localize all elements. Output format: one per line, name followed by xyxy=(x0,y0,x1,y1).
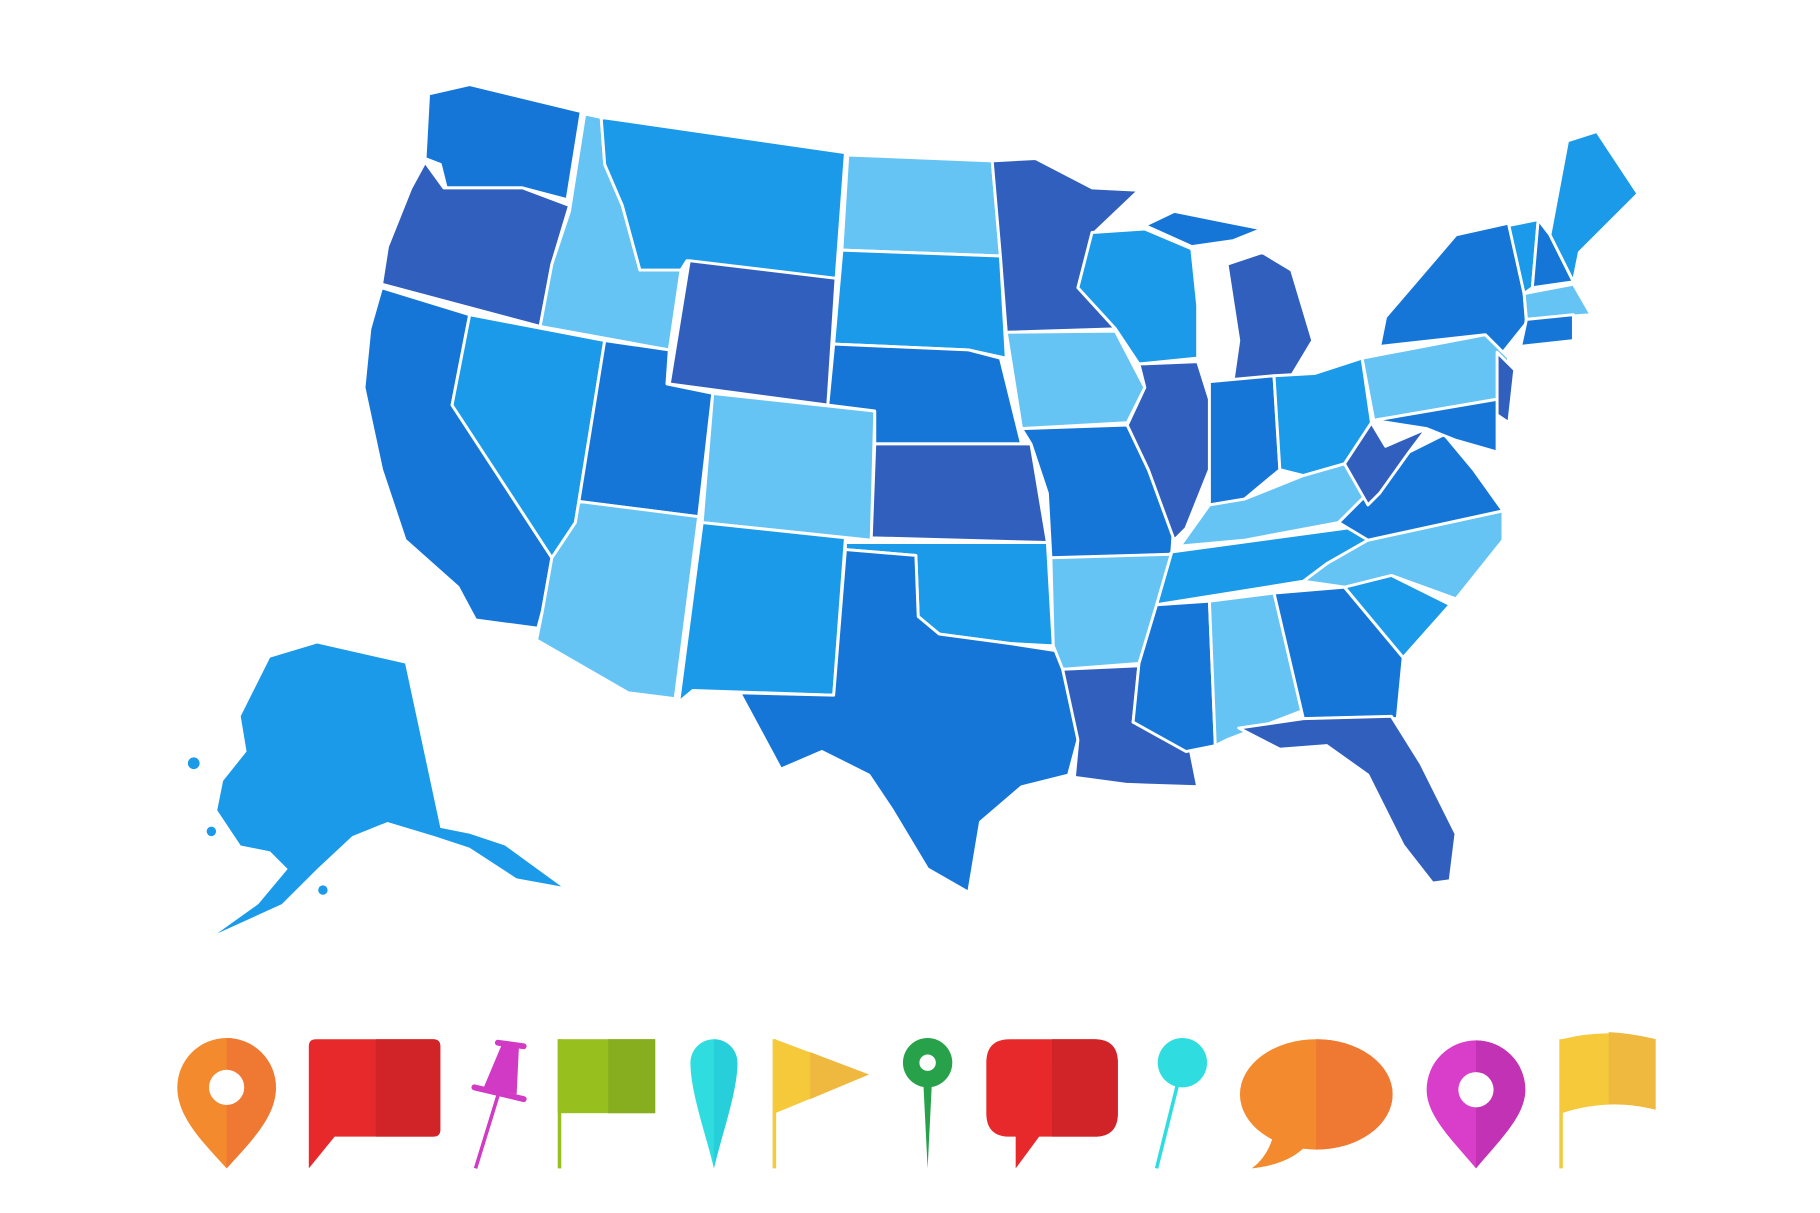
icon: red speech bubble xyxy=(309,1039,440,1168)
icon: magenta push pin xyxy=(474,1043,524,1168)
icon: magenta location pin xyxy=(1427,1040,1525,1168)
map: Alaska xyxy=(188,643,561,934)
icon: green needle pin xyxy=(903,1038,952,1168)
icon: orange oval speech bubble xyxy=(1240,1039,1393,1168)
icon: cyan drop pin xyxy=(690,1039,737,1168)
icon: cyan round pin xyxy=(1157,1038,1207,1168)
map: United States states xyxy=(364,85,1638,892)
icon row: map pins and flags xyxy=(177,1032,1656,1168)
icon: green flag xyxy=(558,1039,655,1168)
icon: red rounded speech bubble xyxy=(986,1039,1118,1168)
icon: yellow wavy flag xyxy=(1559,1032,1656,1168)
icon: orange location pin xyxy=(177,1038,276,1168)
icon: yellow pennant flag xyxy=(773,1039,869,1168)
